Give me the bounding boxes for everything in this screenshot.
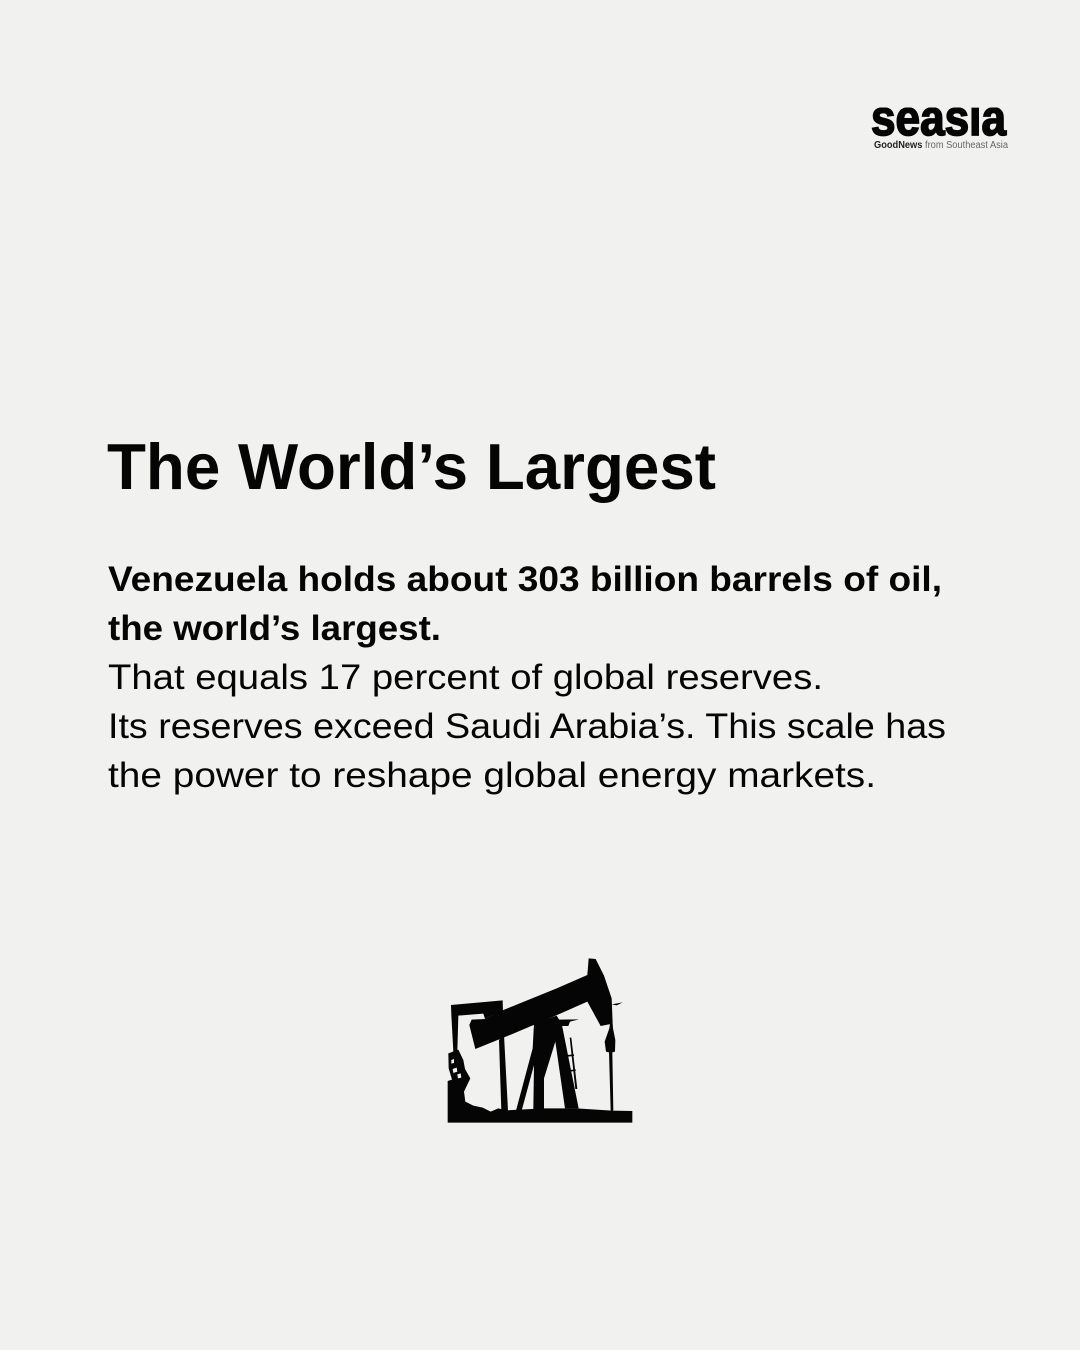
logo: seasia wordmark and tagline: seasia	[871, 90, 1007, 146]
body text block: Its reserves exceed Saudi Arabia’s. This scale has	[108, 707, 946, 746]
samson post frame	[516, 1016, 579, 1111]
logo: seasia wordmark and tagline: GoodNews from Southeast Asia	[874, 140, 1008, 151]
body text block	[108, 560, 946, 795]
logo: seasia wordmark and tagline	[872, 108, 1008, 148]
body text block: the power to reshape global energy markets.	[108, 756, 876, 795]
pitman rod	[499, 1035, 508, 1111]
platform, ladder and details	[557, 1002, 623, 1089]
counterweight arm	[451, 1000, 503, 1052]
body text block: That equals 17 percent of global reserves.	[108, 658, 823, 697]
body text block: the world’s largest.	[108, 609, 441, 648]
walking beam and horsehead	[469, 958, 613, 1049]
icon: oil pump jack silhouette	[448, 958, 632, 1123]
title: The World’s Largest	[107, 430, 716, 503]
body text block: Venezuela holds about 303 billion barrels of oil,	[108, 560, 942, 599]
ground and machinery base	[448, 1050, 632, 1123]
machinery gaps	[451, 1059, 461, 1078]
polished rod and stuffing box	[605, 1024, 615, 1111]
